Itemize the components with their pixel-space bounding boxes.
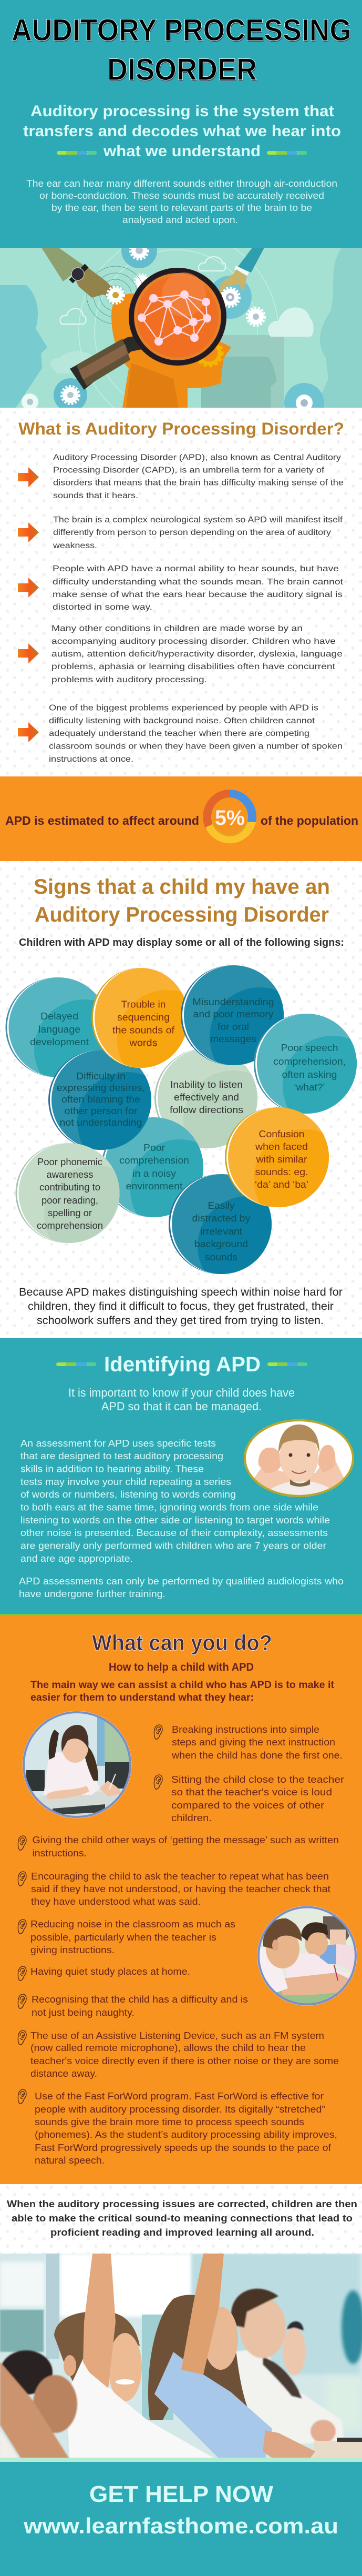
donut chart 5% bbox=[203, 790, 256, 843]
bubble: poor speech comprehension: ‘what?’ bbox=[294, 1082, 325, 1093]
bubble: poor speech comprehension: often asking bbox=[282, 1069, 337, 1080]
website url: www.learnfasthome.com.au bbox=[23, 2513, 338, 2538]
tip: Fast ForWord: sounds give the brain more time to process speech sounds bbox=[35, 2117, 304, 2127]
tip: other ways: instructions. bbox=[33, 1848, 87, 1858]
bubble: poor speech comprehension bbox=[254, 1014, 357, 1114]
paragraph: other conditions: problems, aphasia or learning disabilities often have concurrent bbox=[51, 662, 336, 671]
bubble: poor phonemic awareness: awareness bbox=[46, 1169, 94, 1180]
ear icon bbox=[18, 1836, 26, 1850]
body paragraph: other noise is presented. Because of their complexity, assessments bbox=[20, 1528, 328, 1538]
bubble: misunderstanding: and poor memory bbox=[193, 1009, 273, 1019]
bubble: easily distracted: background bbox=[194, 1239, 248, 1249]
bubble: trouble sequencing: the sounds of bbox=[112, 1025, 175, 1035]
paragraph: definition: disorders that means that the brain has difficulty making sense of the bbox=[53, 479, 344, 487]
lead text bbox=[30, 1680, 335, 1703]
bubble: easily distracted: irrelevant bbox=[200, 1226, 242, 1237]
intro paragraph: or bone-conduction. These sounds must be accurately received bbox=[39, 190, 324, 201]
body paragraph: An assessment for APD uses specific tests bbox=[20, 1438, 216, 1449]
body paragraph: to both ears at the same time, ignoring words from one side while bbox=[20, 1502, 318, 1513]
paragraph: neurological system bbox=[53, 516, 343, 550]
subtitle: what we understand bbox=[103, 143, 261, 160]
bubble: difficulty expressing: other person for bbox=[64, 1106, 138, 1116]
magnifying glass bbox=[70, 268, 226, 390]
tip: quiet study: Having quiet study places at home. bbox=[30, 1966, 190, 1977]
bubble: poor phonemic awareness bbox=[16, 1143, 120, 1243]
bubble: trouble sequencing: sequencing bbox=[117, 1012, 170, 1023]
tip: not naughty: not just being naughty. bbox=[32, 2007, 135, 2018]
bubble: poor speech comprehension: comprehension, bbox=[273, 1056, 346, 1067]
paragraph: background noise: adequately understand the teacher when there are competing bbox=[49, 729, 309, 738]
bubble: inability to listen: Inability to listen bbox=[170, 1079, 243, 1090]
tip: reduce noise bbox=[30, 1919, 235, 1955]
tip: ask to repeat: they have understood what was said. bbox=[31, 1896, 201, 1907]
tip: Fast ForWord: natural speech. bbox=[35, 2155, 105, 2166]
bubble: poor comprehension in noise: Poor bbox=[143, 1143, 165, 1153]
paragraph: normal hearing bbox=[53, 564, 344, 612]
bubble: poor phonemic awareness: Poor phonemic bbox=[37, 1157, 102, 1167]
audiologist note: APD assessments can only be performed by qualified audiologists who bbox=[19, 1576, 344, 1587]
panel: call to action bbox=[0, 2462, 362, 2576]
panel: identifying APD bbox=[0, 1338, 362, 1614]
paragraph: other conditions: Many other conditions in children are made worse by an bbox=[51, 624, 303, 633]
paragraph: neurological system: The brain is a complex neurological system so APD will manifest itself bbox=[53, 516, 343, 524]
paragraph: neurological system: weakness. bbox=[53, 541, 97, 550]
ear icon bbox=[18, 1872, 26, 1886]
tip: sit close: children. bbox=[171, 1813, 212, 1823]
tip: reduce noise: Reducing noise in the classroom as much as bbox=[30, 1919, 235, 1930]
conclusion text: able to make the critical sound-to meaning connections that lead to bbox=[12, 2213, 353, 2224]
subtitle: Auditory processing is the system that bbox=[30, 103, 334, 120]
donut chart 5%: 5% bbox=[215, 806, 245, 830]
grey head silhouette bbox=[201, 335, 284, 409]
tip: simple steps: steps and giving the next instruction bbox=[172, 1737, 335, 1747]
lead text: APD so that it can be managed. bbox=[101, 1400, 262, 1413]
tip: other ways bbox=[33, 1835, 339, 1858]
intro paragraph: analysed and acted upon. bbox=[122, 215, 238, 225]
heading: What can you do? bbox=[92, 1630, 272, 1655]
tip: Fast ForWord: (phonemes). As the student’s auditory processing ability improves, bbox=[35, 2129, 337, 2140]
paragraph: other conditions: autism, attention deficit/hyperactivity disorder, dyslexia, language bbox=[51, 650, 343, 659]
tip: listening device: The use of an Assistive Listening Device, such as an FM system bbox=[30, 2031, 324, 2041]
bubble: easily distracted: Easily bbox=[208, 1200, 234, 1211]
conclusion text: proficient reading and improved learning all around. bbox=[50, 2227, 314, 2238]
yellow cog bbox=[196, 340, 222, 366]
audiologist note bbox=[19, 1576, 344, 1599]
tip: Fast ForWord: people with auditory processing disorder. Its digitally “stretched” bbox=[35, 2104, 325, 2115]
bubble: misunderstanding: for oral bbox=[218, 1022, 249, 1032]
bubble: poor speech comprehension: Poor speech bbox=[281, 1043, 338, 1053]
paragraph: other conditions: problems with auditory processing. bbox=[51, 675, 207, 684]
bubble: misunderstanding bbox=[181, 965, 284, 1065]
cogs bbox=[22, 248, 324, 408]
bubble: poor phonemic awareness: poor reading, bbox=[42, 1195, 98, 1206]
tip: simple steps bbox=[171, 1724, 343, 1761]
tip: simple steps: Breaking instructions into simple bbox=[172, 1724, 319, 1735]
body paragraph: are generally only performed with children who are 7 years or older bbox=[20, 1541, 326, 1551]
bubble: delayed language: language bbox=[38, 1024, 80, 1035]
tip: simple steps: when the child has done the first one. bbox=[171, 1750, 343, 1761]
paragraph: other conditions: accompanying auditory processing disorder. Children who have bbox=[51, 637, 336, 646]
bubble: trouble sequencing: Trouble in bbox=[121, 999, 166, 1009]
photo: boys writing in class bbox=[255, 1904, 362, 2007]
heading bbox=[34, 875, 330, 926]
paragraph: normal hearing: distorted in some way. bbox=[53, 603, 152, 612]
heading: What is Auditory Processing Disorder? bbox=[18, 419, 344, 438]
ear icon bbox=[18, 1920, 26, 1934]
title bbox=[12, 13, 352, 88]
ear icon bbox=[18, 2031, 26, 2045]
bubble: poor comprehension in noise: comprehension bbox=[119, 1155, 189, 1166]
lead text: The main way we can assist a child who has APD is to make it bbox=[30, 1680, 335, 1691]
bubble: easily distracted: distracted by bbox=[192, 1213, 250, 1224]
tip: ask to repeat: Encouraging the child to ask the teacher to repeat what has been bbox=[31, 1871, 329, 1882]
bubble: inability to listen: follow directions bbox=[170, 1105, 243, 1115]
conclusion text bbox=[7, 2199, 357, 2238]
bubble: difficulty expressing bbox=[48, 1050, 151, 1150]
panel: statistic band bbox=[0, 776, 362, 861]
title: DISORDER bbox=[107, 53, 257, 87]
paragraph: definition: Auditory Processing Disorder (APD), also known as Central Auditory bbox=[53, 453, 341, 462]
tip: Fast ForWord bbox=[35, 2091, 337, 2166]
tip: not naughty bbox=[32, 1994, 248, 2018]
sound rings bbox=[87, 266, 144, 324]
panel: conclusion bbox=[0, 2184, 362, 2254]
subheading: How to help a child with APD bbox=[109, 1661, 254, 1673]
panel: header bbox=[0, 0, 362, 248]
bubble: poor phonemic awareness: contributing to bbox=[39, 1182, 100, 1193]
table bbox=[314, 2441, 362, 2458]
tip: reduce noise: possible, particularly when the teacher is bbox=[30, 1932, 216, 1943]
left hand with watch bbox=[42, 248, 124, 304]
body paragraph: tests may involve your child repeating a series bbox=[20, 1477, 231, 1487]
closing paragraph: schoolwork suffers and they get tired from trying to listen. bbox=[37, 1315, 324, 1327]
boy bbox=[54, 2254, 215, 2459]
body paragraph: that are designed to test auditory processing bbox=[20, 1451, 223, 1461]
bubble: difficulty expressing: not understanding bbox=[60, 1117, 142, 1128]
closing paragraph: Because APD makes distinguishing speech within noise hard for bbox=[19, 1286, 343, 1298]
tip: ask to repeat bbox=[31, 1871, 330, 1907]
bubble: misunderstanding: messages bbox=[210, 1034, 256, 1044]
bubble: confusion similar sounds: Confusion bbox=[258, 1129, 305, 1139]
brain network bbox=[138, 290, 211, 346]
bubble: confusion similar sounds: sounds: eg. bbox=[255, 1167, 308, 1177]
bubble: easily distracted bbox=[169, 1174, 272, 1274]
photo: girl writing in class bbox=[21, 1710, 134, 1820]
right silhouette bbox=[320, 248, 362, 408]
tip: Fast ForWord: Use of the Fast ForWord program. Fast ForWord is effective for bbox=[35, 2091, 324, 2102]
paragraph: neurological system: differently from person to person depending on the area of auditory bbox=[53, 528, 331, 537]
statistic text left: APD is estimated to affect around bbox=[5, 814, 199, 827]
bubble: poor comprehension in noise bbox=[103, 1117, 203, 1217]
clouds bbox=[50, 257, 314, 373]
audiologist note: have undergone further training. bbox=[19, 1589, 166, 1599]
ear icon bbox=[18, 1966, 26, 1981]
bubble: confusion similar sounds: ‘da’ and ‘ba’ bbox=[255, 1179, 308, 1190]
tip: sit close: compared to the voices of other bbox=[171, 1800, 324, 1811]
tip: Fast ForWord: Fast ForWord progressively speeds up the sounds to the pace of bbox=[35, 2143, 332, 2153]
tip: ask to repeat: said if they have not understood, or having the teacher check that bbox=[31, 1884, 330, 1894]
tip: other ways: Giving the child other ways of ‘getting the message’ such as written bbox=[33, 1835, 339, 1845]
bubble: confusion similar sounds: with similar bbox=[255, 1154, 307, 1165]
bubble: confusion similar sounds: when faced bbox=[255, 1141, 308, 1152]
bubble: delayed language: development bbox=[30, 1037, 89, 1047]
bubble: poor comprehension in noise: environment bbox=[126, 1181, 183, 1191]
tip: sit close bbox=[171, 1774, 344, 1823]
ear icon bbox=[18, 1994, 26, 2008]
bubble: poor phonemic awareness: spelling or bbox=[48, 1208, 92, 1218]
ear icon bbox=[154, 1775, 162, 1789]
panel: signs bbox=[0, 861, 362, 1338]
right hand with cuff bbox=[220, 248, 264, 295]
conclusion text: When the auditory processing issues are corrected, children are then bbox=[7, 2199, 357, 2209]
bubble: easily distracted: sounds bbox=[205, 1252, 237, 1262]
bubble: confusion similar sounds bbox=[225, 1107, 329, 1207]
intro paragraph: by the ear, then be sent to relevant parts of the brain to be bbox=[51, 203, 312, 213]
subtitle bbox=[23, 103, 341, 160]
arrow icons bbox=[18, 467, 39, 742]
left silhouette bbox=[0, 285, 47, 408]
heading: Auditory Processing Disorder bbox=[35, 903, 329, 926]
closing paragraph: children, they find it difficult to focus, they get frustrated, their bbox=[28, 1300, 334, 1312]
get help heading: GET HELP NOW bbox=[89, 2481, 273, 2507]
tip: sit close: Sitting the child close to the teacher bbox=[171, 1774, 344, 1785]
bubble: trouble sequencing: words bbox=[129, 1038, 158, 1048]
orange head bbox=[111, 294, 231, 408]
statistic text right: of the population bbox=[261, 814, 358, 827]
bubble: poor comprehension in noise: in a noisy bbox=[132, 1168, 176, 1179]
paragraph: normal hearing: People with APD have a normal ability to hear sounds, but have bbox=[53, 564, 339, 573]
lead text bbox=[68, 1386, 295, 1413]
paragraph: background noise: difficulty listening with background noise. Often children cannot bbox=[49, 716, 315, 725]
tip: not naughty: Recognising that the child has a difficulty and is bbox=[32, 1994, 248, 2005]
body paragraph bbox=[20, 1438, 330, 1564]
body paragraph: of words or numbers, listening to words coming bbox=[20, 1489, 236, 1500]
centre girl bbox=[148, 2254, 315, 2459]
paragraph: background noise: instructions at once. bbox=[49, 755, 133, 764]
paragraph: definition bbox=[53, 453, 344, 500]
lead text: easier for them to understand what they hear: bbox=[30, 1692, 254, 1703]
bubble: delayed language bbox=[5, 977, 103, 1077]
bubble: difficulty expressing: Difficulty in bbox=[76, 1071, 126, 1082]
sub heading: Children with APD may display some or all of the following signs: bbox=[19, 937, 344, 948]
paragraph: normal hearing: difficulty understanding what the sounds mean. The brain cannot bbox=[53, 578, 344, 587]
paragraph: other conditions bbox=[51, 624, 343, 684]
panel: what is APD bbox=[0, 408, 362, 776]
tip: listening device: teacher's voice directly even if there is other noise or they are some bbox=[30, 2056, 339, 2066]
tip: listening device: (now called remote microphone), allows the child to hear the bbox=[30, 2043, 306, 2053]
ear icon bbox=[18, 2089, 26, 2104]
heading: Identifying APD bbox=[104, 1353, 261, 1376]
title: DISORDER bbox=[108, 54, 257, 88]
body paragraph: skills in addition to hearing ability. These bbox=[20, 1464, 204, 1474]
ear icon bbox=[154, 1725, 162, 1739]
photo: children raising hands bbox=[0, 2254, 362, 2462]
body paragraph: listening to words on the other side or listening to target words while bbox=[20, 1515, 330, 1526]
closing paragraph bbox=[19, 1286, 343, 1327]
tip: reduce noise: giving instructions. bbox=[30, 1945, 115, 1955]
photo: child cupping ears bbox=[242, 1418, 357, 1499]
bubble: difficulty expressing: often blaming the bbox=[61, 1094, 140, 1105]
paragraph: background noise: One of the biggest problems experienced by people with APD is bbox=[49, 704, 318, 712]
tip: listening device bbox=[30, 2031, 339, 2079]
paragraph: normal hearing: make sense of what the ears hear because the auditory signal is bbox=[53, 590, 343, 599]
panel: what can you do bbox=[0, 1614, 362, 2184]
bubble: poor phonemic awareness: comprehension bbox=[37, 1220, 103, 1231]
subtitle: transfers and decodes what we hear into bbox=[23, 123, 341, 140]
intro paragraph: The ear can hear many different sounds either through air-conduction bbox=[26, 178, 337, 189]
bubble: inability to listen bbox=[154, 1049, 257, 1148]
paragraph: definition: Processing Disorder (CAPD), is an umbrella term for a variety of bbox=[53, 466, 325, 474]
bubble: difficulty expressing: expressing desires, bbox=[57, 1083, 145, 1093]
bubble: delayed language: Delayed bbox=[40, 1011, 78, 1022]
bubble: misunderstanding: Misunderstanding bbox=[192, 997, 274, 1007]
illustration: brain under magnifying glass bbox=[0, 248, 362, 408]
bubble: inability to listen: effectively and bbox=[174, 1092, 239, 1103]
faint circles bbox=[78, 248, 278, 408]
lead text: It is important to know if your child does have bbox=[68, 1386, 295, 1399]
right girl and far boy bbox=[231, 2289, 344, 2446]
paragraph: background noise: classroom sounds or when they have been given a number of spoken bbox=[49, 742, 343, 751]
left child bbox=[0, 2350, 77, 2459]
paragraph: background noise bbox=[49, 704, 343, 764]
body paragraph: and are age appropriate. bbox=[20, 1553, 133, 1564]
heading: Signs that a child my have an bbox=[34, 875, 330, 898]
tip: listening device: distance away. bbox=[30, 2068, 97, 2079]
paragraph: definition: sounds that it hears. bbox=[53, 491, 138, 500]
heading bbox=[56, 1353, 307, 1376]
bubble: trouble sequencing bbox=[91, 968, 185, 1068]
intro paragraph bbox=[26, 178, 337, 225]
tip: sit close: so that the teacher's voice is loud bbox=[171, 1787, 332, 1797]
